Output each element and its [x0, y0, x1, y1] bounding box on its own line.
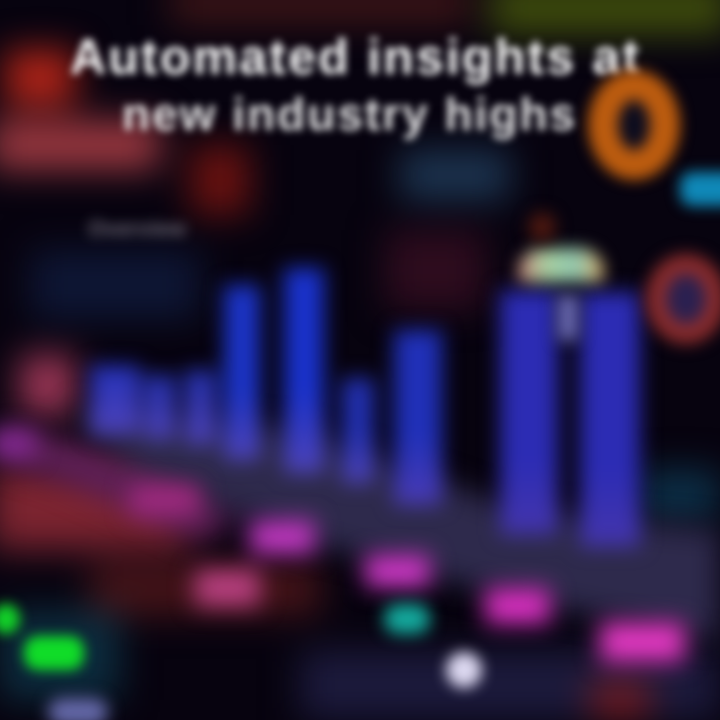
- icon: pale column accent: [558, 295, 578, 340]
- icon: green shape: [0, 596, 93, 680]
- icon: pale blue marker: [48, 698, 108, 720]
- title line 1: Automated insights at: [70, 29, 641, 85]
- icon: white marker: [446, 652, 482, 688]
- bar 7: [394, 330, 442, 505]
- bar 1: [90, 365, 140, 435]
- title: [66, 29, 644, 146]
- icon: orange donut: [588, 70, 680, 180]
- bar chart: [75, 252, 656, 560]
- magenta data strip: [0, 416, 704, 681]
- bar 8: [500, 290, 558, 535]
- bar 4: [224, 285, 260, 460]
- icon: cyan pill: [680, 172, 720, 206]
- bar 6: [342, 378, 374, 483]
- icon: red ring: [646, 254, 720, 344]
- bar 5: [284, 268, 324, 473]
- bar 9: [580, 292, 640, 547]
- icon: red marker: [528, 212, 556, 242]
- subheading: Overview: [88, 216, 186, 241]
- icon: teal marker: [384, 604, 430, 634]
- title line 2: new industry highs: [122, 88, 577, 140]
- bar 2: [145, 375, 175, 440]
- icon: rainbow cap: [518, 248, 604, 282]
- bar 3: [185, 370, 215, 445]
